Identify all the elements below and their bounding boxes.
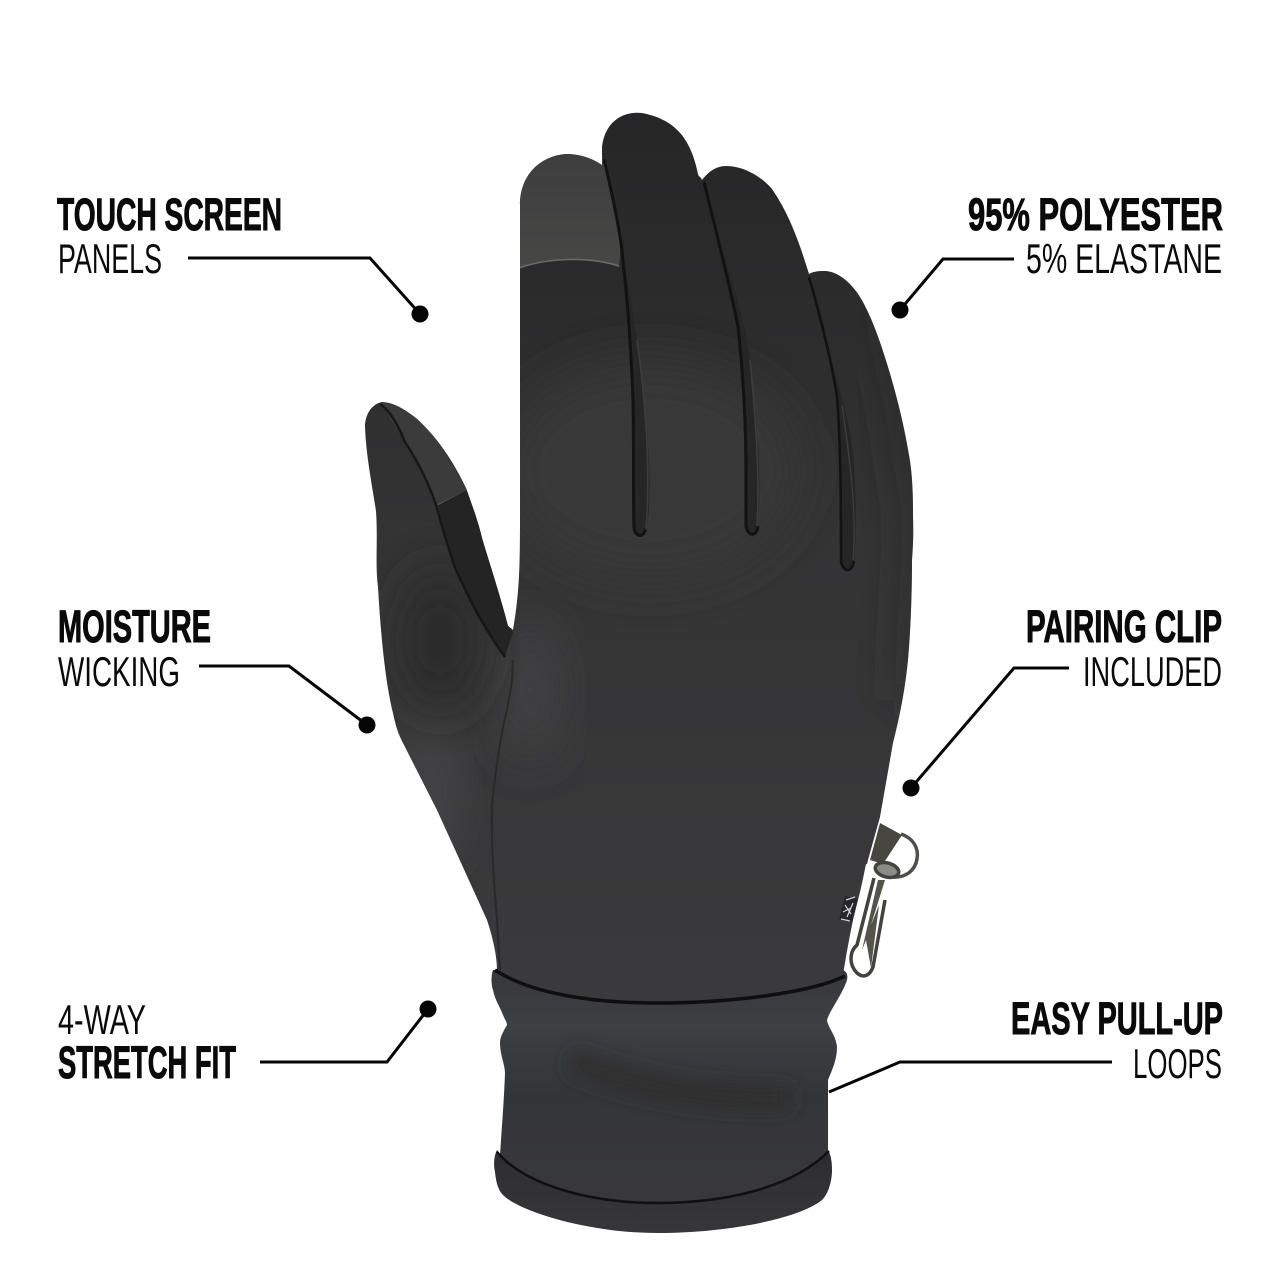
callout: touch screen panels: PANELS [58, 235, 162, 282]
callout: touch screen panels [57, 189, 428, 322]
cuff hem band [494, 1150, 832, 1233]
thumb seam [380, 404, 505, 657]
infographic canvas [57, 112, 1223, 1233]
cuff top shadow line [495, 970, 845, 1003]
callout: easy pull-up loops [829, 993, 1223, 1092]
callout: pairing clip [902, 601, 1222, 796]
callout: moisture wicking [58, 601, 376, 734]
hand body [365, 113, 925, 1005]
callout: easy pull-up loops: LOOPS [1133, 1040, 1222, 1087]
touch panel: index finger [520, 154, 620, 267]
glove illustration [365, 113, 925, 1233]
callout: fabric composition [892, 189, 1223, 318]
callout: touch screen panels: TOUCH SCREEN [57, 189, 282, 240]
callout: 4-way stretch fit: STRETCH FIT [58, 1037, 236, 1088]
touch panel: thumb [380, 402, 467, 505]
finger slit: ring and little [825, 340, 856, 570]
callout: moisture wicking: MOISTURE [58, 601, 211, 652]
finger slit: middle and ring [722, 250, 759, 534]
pull-up loop clip [849, 823, 917, 976]
fold-over cuff [492, 960, 847, 1210]
callout: 4-way stretch fit: 4-WAY [58, 996, 146, 1043]
finger slit: index and middle [621, 243, 650, 536]
palm seam [492, 660, 513, 970]
callout: moisture wicking: WICKING [58, 648, 180, 695]
woven logo tag [839, 896, 858, 922]
callout: 4-way stretch fit [58, 996, 436, 1088]
